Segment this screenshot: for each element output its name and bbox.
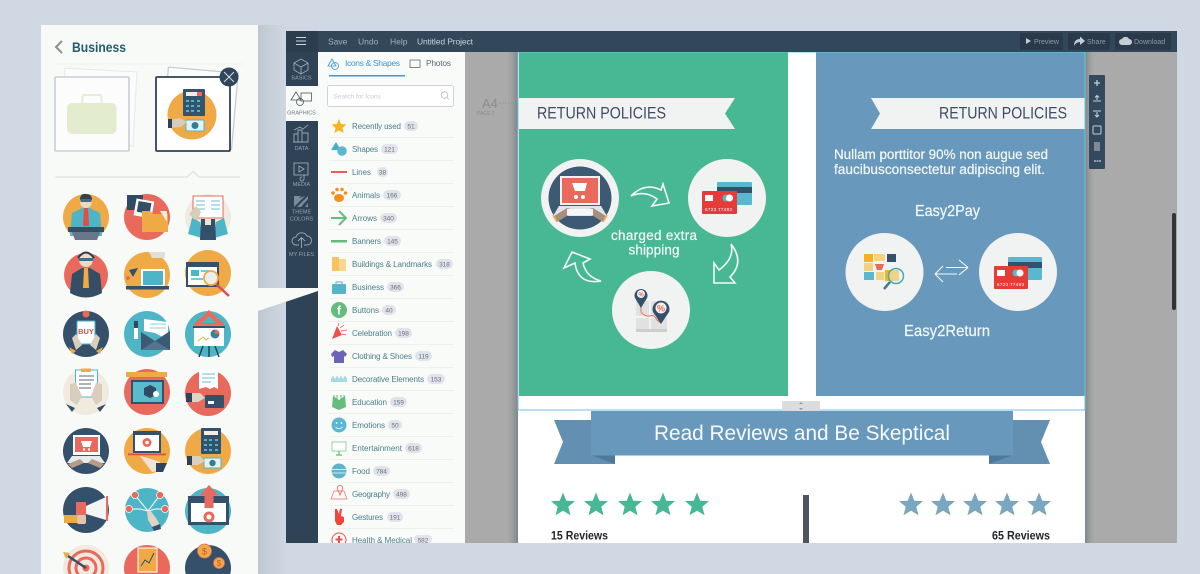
tab: media bbox=[293, 163, 311, 188]
icon: coins: $ bbox=[217, 559, 222, 568]
banner: return policies right: RETURN POLICIES bbox=[939, 104, 1067, 122]
icon: laptop on desk bbox=[124, 252, 170, 298]
panel shadow bbox=[258, 25, 288, 574]
icon: laptop cart circle bbox=[541, 159, 619, 237]
item: Gestures: Gestures bbox=[352, 513, 383, 522]
panel: green return policies bbox=[519, 52, 788, 396]
item: Emotions: 50 bbox=[391, 422, 399, 430]
item: Buildings & Landmarks: Buildings & Landmarks bbox=[352, 260, 432, 269]
item: Entertainment: 618 bbox=[408, 446, 419, 452]
item: Gestures: 191 bbox=[390, 514, 401, 522]
text block: body copy: Nullam porttitor 90% non augue sed bbox=[834, 147, 1048, 162]
item: Buttons: f bbox=[337, 304, 342, 318]
menu items: Untitled Project bbox=[417, 36, 474, 46]
item: Lines bbox=[331, 167, 388, 177]
connector wedge bbox=[258, 288, 318, 311]
icon: browser gear with hand bbox=[124, 428, 170, 474]
menu items: Save bbox=[328, 36, 348, 46]
button: Preview bbox=[1020, 33, 1063, 50]
item: Emotions: Emotions bbox=[352, 421, 385, 430]
icon: photos and folder bbox=[124, 194, 170, 240]
button: Download bbox=[1115, 33, 1171, 50]
icon: BUY tablet bbox=[63, 310, 109, 357]
tab: theme colors: THEME bbox=[292, 210, 311, 216]
icon: credit cards circle bbox=[979, 233, 1057, 311]
card: selected calculator icon bbox=[156, 67, 238, 151]
item: Celebration: Celebration bbox=[352, 329, 392, 338]
ribbon: read reviews heading bbox=[554, 411, 1050, 464]
label: Easy2Return: Easy2Return bbox=[904, 323, 990, 340]
item: Animals: 166 bbox=[387, 192, 398, 200]
item: Education: 159 bbox=[393, 400, 404, 406]
selection outline bbox=[518, 52, 1085, 410]
icon: clipboard bbox=[63, 368, 109, 415]
button: Share bbox=[1068, 33, 1110, 50]
item: Decorative Elements bbox=[331, 374, 445, 384]
menu items bbox=[328, 36, 474, 46]
item: Health & Medical bbox=[332, 533, 432, 547]
item: Food: Food bbox=[352, 467, 370, 476]
tab: Icons & Shapes: Icons & Shapes bbox=[345, 58, 400, 68]
tab: Photos: Photos bbox=[426, 58, 451, 68]
item: Emotions bbox=[332, 418, 402, 432]
banner: return policies right bbox=[871, 98, 1085, 129]
button: Preview: Preview bbox=[1034, 39, 1060, 46]
item: Shapes: Shapes bbox=[352, 145, 378, 154]
divider bar bbox=[803, 495, 809, 543]
tab: my files: MY FILES bbox=[289, 252, 314, 258]
arrow: right bbox=[714, 244, 738, 283]
item: Clothing & Shoes: 119 bbox=[418, 354, 429, 360]
tab: basics: BASICS bbox=[291, 76, 312, 82]
text block: body copy bbox=[834, 147, 1048, 177]
canvas page label A4: PAGE 2 bbox=[477, 111, 495, 117]
item: Health & Medical: Health & Medical bbox=[352, 536, 412, 545]
item: Entertainment: Entertainment bbox=[352, 444, 403, 453]
item: Buttons: 40 bbox=[385, 308, 393, 314]
button: Download: Download bbox=[1134, 39, 1165, 46]
item: Banners: Banners bbox=[352, 237, 381, 246]
caption: charged extra shipping: shipping bbox=[628, 242, 680, 258]
item: Recently used: 51 bbox=[407, 124, 415, 130]
tab: my files bbox=[289, 233, 314, 258]
bottom background strip bbox=[286, 543, 1200, 574]
tab: data bbox=[293, 125, 309, 152]
scrollbar bbox=[1172, 213, 1176, 310]
item: Animals bbox=[331, 188, 401, 202]
icon: upload gear bbox=[185, 485, 231, 534]
search box bbox=[328, 86, 454, 106]
icon: open book bbox=[185, 194, 231, 240]
icon: tablet chart bbox=[124, 545, 170, 574]
item: Banners: 145 bbox=[387, 238, 398, 246]
icon: coins: $ bbox=[202, 546, 207, 556]
item: Lines: Lines bbox=[352, 168, 371, 177]
top toolbar bbox=[286, 31, 1177, 52]
text block: body copy: faucibusconsectetur adipiscing elit. bbox=[834, 162, 1045, 177]
icon: map circle: % bbox=[657, 304, 665, 314]
item: Recently used: Recently used bbox=[352, 122, 401, 131]
card: briefcase placeholder bbox=[55, 68, 137, 151]
icon: map circle: % bbox=[638, 292, 644, 298]
item: Buildings & Landmarks bbox=[332, 257, 453, 271]
icon: credit cards circle: 6723 77493 bbox=[705, 207, 732, 212]
tab: graphics active bbox=[286, 86, 318, 121]
menu items: Help bbox=[390, 36, 408, 46]
icon: monitor with box bbox=[124, 369, 170, 415]
icon: megaphone bbox=[63, 487, 109, 533]
menu items: Undo bbox=[358, 36, 379, 46]
item: Business: 366 bbox=[390, 284, 401, 292]
close button bbox=[220, 68, 238, 86]
item: Celebration: 198 bbox=[398, 330, 409, 338]
item: Buttons: Buttons bbox=[352, 306, 379, 315]
tab: Icons & Shapes bbox=[328, 58, 405, 76]
banner: return policies left bbox=[519, 98, 735, 129]
rating: right stars bbox=[899, 492, 1051, 515]
item: Geography bbox=[331, 485, 410, 499]
item: Food: 784 bbox=[376, 468, 387, 476]
item: Lines: 38 bbox=[379, 170, 386, 176]
item: Health & Medical: 582 bbox=[418, 538, 429, 544]
icon: coins bbox=[185, 544, 231, 574]
item: Buildings & Landmarks: 318 bbox=[439, 262, 450, 268]
caption: charged extra shipping bbox=[611, 228, 697, 258]
item: Gestures bbox=[335, 508, 403, 525]
item: Arrows bbox=[331, 211, 397, 225]
icon: shop map circle bbox=[846, 233, 924, 311]
item: Celebration bbox=[332, 323, 412, 339]
item: Geography: 498 bbox=[396, 492, 407, 498]
item: Clothing & Shoes: Clothing & Shoes bbox=[352, 352, 412, 361]
item: Education bbox=[332, 395, 407, 410]
icon: support agent bbox=[64, 252, 108, 298]
tab: Photos bbox=[410, 58, 451, 68]
canvas page label A4: A4 bbox=[482, 96, 498, 111]
connector wedge on sidebar bbox=[286, 288, 318, 302]
icon: presentation board bbox=[185, 310, 231, 357]
panel: business icon picker bbox=[41, 25, 258, 574]
icon: credit cards circle bbox=[688, 159, 766, 237]
item: Decorative Elements: Decorative Elements bbox=[352, 375, 424, 384]
item: Entertainment bbox=[332, 442, 422, 455]
item: Decorative Elements: 153 bbox=[431, 376, 442, 384]
icon: browser and magnifier bbox=[185, 250, 231, 296]
icon: network bbox=[125, 488, 169, 532]
item: Arrows: 340 bbox=[383, 216, 394, 222]
heading: Business: Business bbox=[72, 39, 126, 55]
icon: target bbox=[63, 545, 109, 574]
back chevron bbox=[56, 41, 62, 53]
rating: left stars bbox=[551, 492, 709, 515]
icon: map circle bbox=[612, 271, 690, 349]
item: Animals: Animals bbox=[352, 191, 380, 200]
icon: calculator and banknote bbox=[185, 428, 231, 474]
arrows: exchange bbox=[935, 260, 968, 282]
item: Shapes bbox=[331, 142, 398, 156]
icon: laptop with cart bbox=[63, 428, 109, 474]
item: Business bbox=[332, 282, 404, 294]
caption: charged extra shipping: charged extra bbox=[611, 228, 697, 243]
sidebar bbox=[286, 52, 318, 543]
icon: receipt and card bbox=[185, 369, 231, 416]
tab: basics bbox=[291, 59, 312, 82]
label: Easy2Pay: Easy2Pay bbox=[915, 203, 980, 220]
panel: category list bbox=[318, 52, 465, 547]
arrow: top bbox=[631, 184, 669, 206]
panel: editor app window bbox=[286, 31, 1177, 547]
label: 65 Reviews: 65 Reviews bbox=[992, 528, 1050, 542]
tab: theme colors bbox=[290, 196, 313, 222]
item: Education: Education bbox=[352, 398, 387, 407]
tab: media: MEDIA bbox=[293, 182, 311, 188]
item: Business: Business bbox=[352, 283, 384, 292]
item: Recently used bbox=[332, 119, 418, 133]
item: Shapes: 121 bbox=[384, 146, 395, 154]
tab: data: DATA bbox=[295, 146, 309, 152]
tab: theme colors: COLORS bbox=[290, 216, 313, 222]
arrow: left bbox=[564, 252, 601, 282]
canvas page label A4 bbox=[477, 96, 516, 117]
item: Food bbox=[331, 464, 390, 478]
item: Geography: Geography bbox=[352, 490, 390, 499]
item: Clothing & Shoes bbox=[331, 350, 432, 363]
banner: return policies left: RETURN POLICIES bbox=[537, 104, 666, 122]
icon: envelope bbox=[124, 311, 170, 357]
canvas page bbox=[505, 52, 1096, 543]
icon: BUY tablet: BUY bbox=[78, 327, 94, 336]
item: Arrows: Arrows bbox=[352, 214, 377, 223]
floating page toolbar bbox=[1089, 75, 1105, 169]
panel: blue return policies bbox=[816, 52, 1085, 396]
resize handle bbox=[782, 401, 820, 412]
icon: menu bbox=[296, 38, 306, 44]
icon: credit cards circle: 6723 77493 bbox=[997, 282, 1024, 287]
label: 15 Reviews: 15 Reviews bbox=[551, 528, 608, 542]
tab: graphics active: GRAPHICS bbox=[287, 110, 316, 116]
icon: speaker at podium bbox=[63, 194, 109, 240]
search box: Search for Icons bbox=[334, 94, 382, 100]
item: Banners bbox=[331, 236, 401, 246]
ribbon: read reviews heading: Read Reviews and Be Skeptical bbox=[654, 422, 950, 445]
item: Buttons bbox=[331, 302, 396, 318]
button: Share: Share bbox=[1087, 39, 1106, 46]
